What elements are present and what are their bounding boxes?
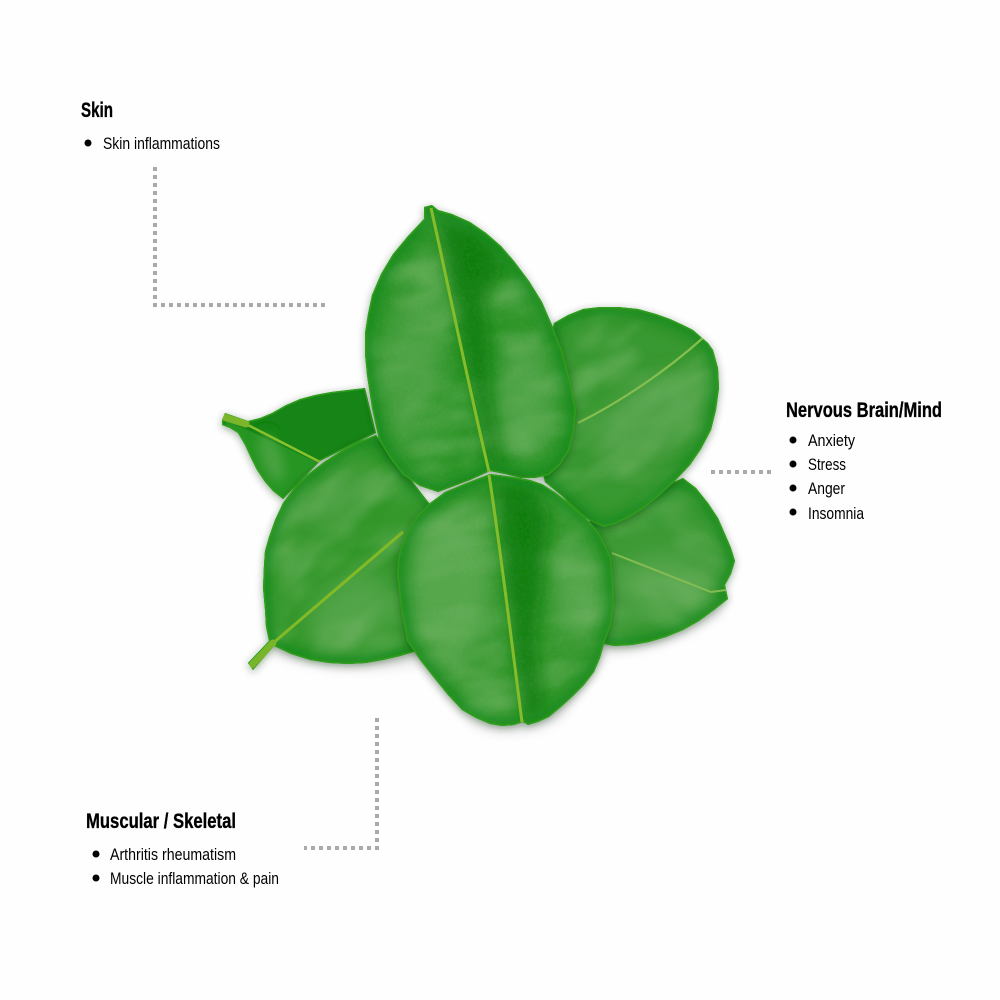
heading and list: skin [81,99,220,153]
list item: insomnia [790,504,864,523]
connector: skin [155,167,327,305]
midrib [612,553,726,592]
heading and list: nervous brain/mind [786,399,942,523]
list item: stress [790,455,846,474]
leaf: lower left large [244,434,432,674]
ground shadow [270,560,722,732]
text: skin inflammations: Skin inflammations [103,134,220,153]
midrib [489,475,522,722]
connector: muscular [304,718,377,848]
midrib [272,532,403,644]
midrib [431,208,490,476]
leaf: upper right [538,304,724,532]
list item: anxiety [790,431,855,450]
list item: stress: Stress [808,455,846,474]
heading: Muscular / Skeletal: Muscular / Skeletal [86,810,236,833]
list item: anger [790,479,845,498]
heading: Nervous Brain/Mind: Nervous Brain/Mind [786,399,942,422]
midrib [223,418,322,463]
leaf cluster illustration [218,203,740,736]
dark band beside midrib [494,478,550,722]
leaf: back left [218,386,378,504]
list item: muscle inflammation and pain: Muscle inflammation & pain [110,869,279,888]
midrib [578,337,704,423]
heading and list: muscular / skeletal [86,810,279,888]
dark band beside midrib [434,212,505,470]
bullet: skin inflammations [84,140,92,146]
list item: insomnia: Insomnia [808,504,864,523]
leaf: back right lower [588,476,740,653]
list item: anxiety: Anxiety [808,431,855,450]
heading: Skin: Skin [81,99,113,122]
leaf: top centre [360,203,580,498]
connector: nervous [711,470,772,474]
leaf: bottom centre [393,472,618,733]
list item: anger: Anger [808,479,845,498]
list item: arthritis rheumatism: Arthritis rheumatism [110,845,236,864]
